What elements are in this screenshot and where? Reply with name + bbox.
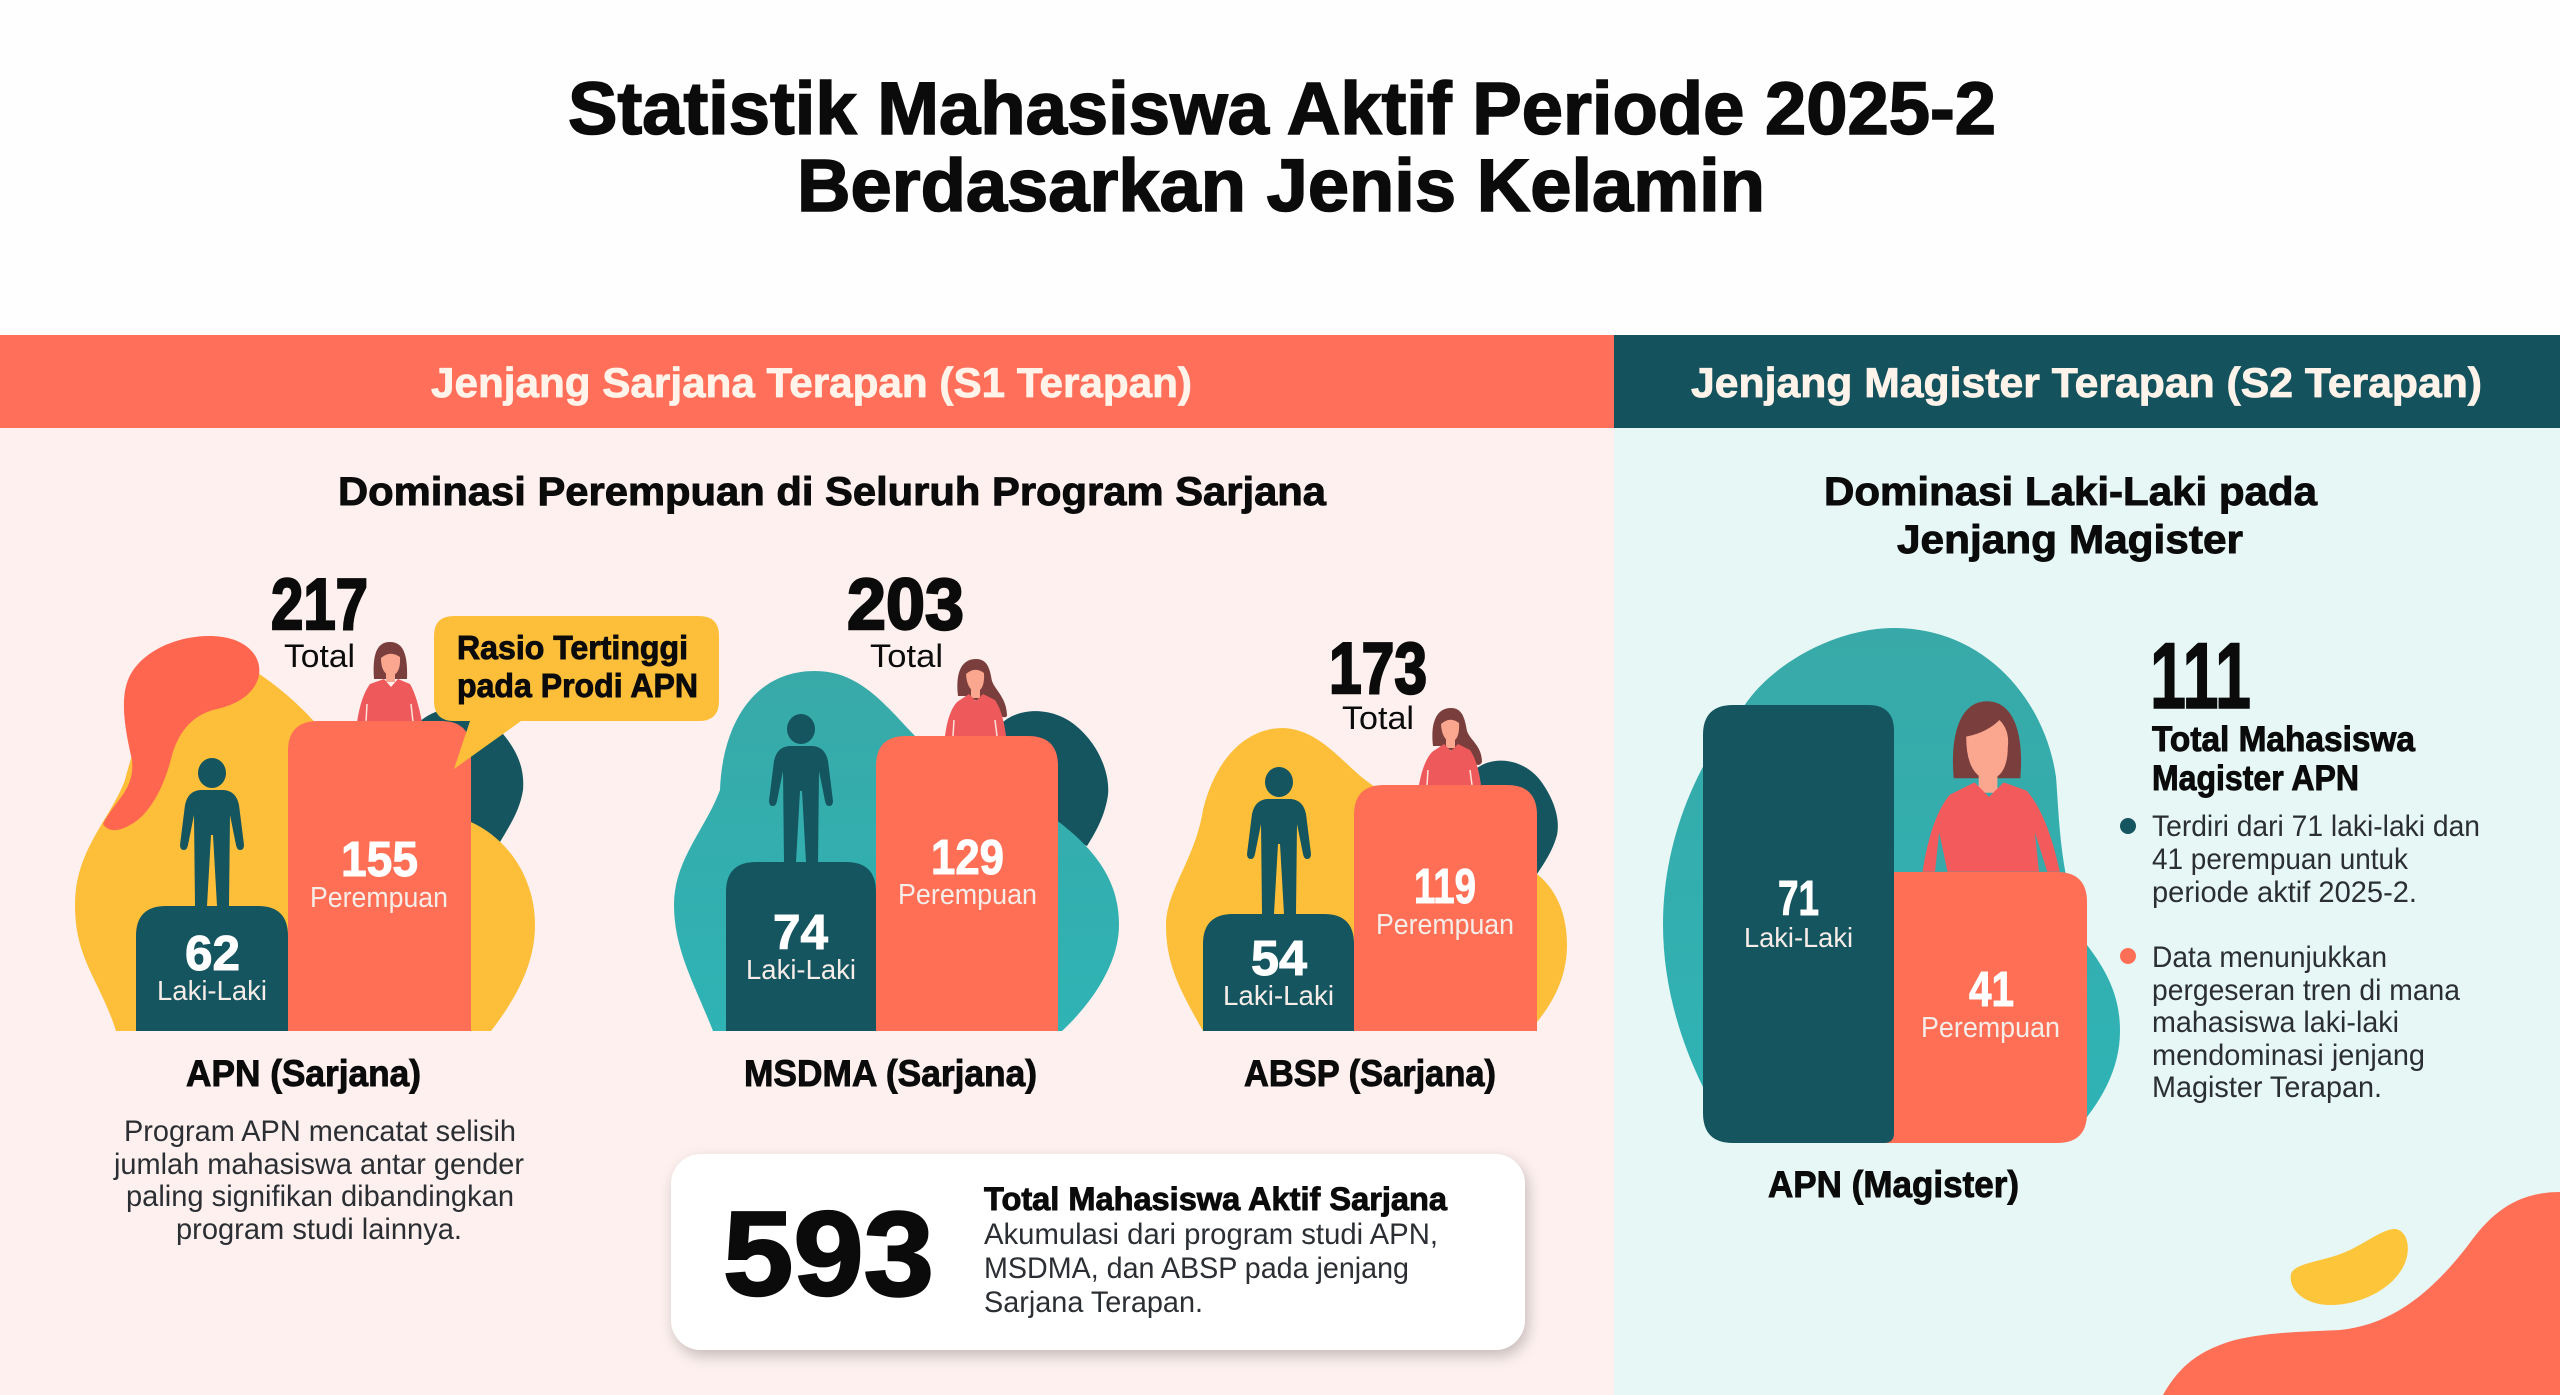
value: 41 perempuan: Perempuan — [1921, 1012, 2060, 1044]
blob: coral — [103, 636, 259, 830]
card text: Sarjana Terapan. — [984, 1286, 1203, 1319]
title — [568, 67, 1996, 227]
value: 71 laki-laki: Laki-Laki — [1744, 922, 1853, 953]
description: APN: jumlah mahasiswa antar gender — [113, 1148, 524, 1181]
bullet text 1: 41 perempuan untuk — [2152, 843, 2409, 876]
value: 74 laki-laki — [746, 906, 856, 985]
bar: laki-laki 62 — [136, 906, 288, 1031]
label: MSDMA Sarjana: MSDMA (Sarjana) — [744, 1053, 1037, 1094]
chart: ABSP Sarjana — [1166, 629, 1567, 1094]
subheading: Magister: Jenjang Magister — [1897, 518, 2243, 562]
icon: woman — [357, 642, 422, 722]
value: 41 perempuan: 41 — [1969, 963, 2014, 1017]
total: 217: 217 — [271, 565, 368, 645]
value: 54 laki-laki: Laki-Laki — [1223, 980, 1334, 1011]
bullet text 2: mahasiswa laki-laki — [2152, 1006, 2399, 1039]
description: APN: program studi lainnya. — [176, 1213, 462, 1246]
stat: 111 total: Magister APN — [2152, 759, 2359, 798]
bullet text 1: periode aktif 2025-2. — [2152, 876, 2417, 909]
bar: perempuan 41 — [1860, 872, 2087, 1143]
total: 217: Total — [284, 638, 355, 674]
subheading: Sarjana: Dominasi Perempuan di Seluruh Program Sarjana — [338, 470, 1327, 514]
value: 129 perempuan: Perempuan — [898, 879, 1037, 911]
icon: woman — [1923, 701, 2060, 872]
value: 119 perempuan: 119 — [1414, 860, 1476, 914]
value: 74 laki-laki: Laki-Laki — [746, 954, 856, 985]
bar: perempuan 119 — [1354, 785, 1537, 1031]
value: 129 perempuan: 129 — [931, 831, 1004, 885]
chart: APN Sarjana — [75, 565, 719, 1246]
total: 173: Total — [1342, 700, 1414, 736]
value: 62 laki-laki: 62 — [185, 927, 240, 981]
chart: MSDMA Sarjana — [674, 565, 1119, 1094]
callout: rasio tertinggi: Rasio Tertinggi — [457, 629, 688, 666]
bar: perempuan 155 — [288, 721, 471, 1031]
bar: laki-laki 74 — [726, 862, 876, 1031]
total: 173 — [1329, 629, 1427, 736]
bullet text 2: Magister Terapan. — [2152, 1071, 2382, 1104]
title: Berdasarkan Jenis Kelamin — [797, 144, 1765, 227]
icon: man — [769, 714, 833, 862]
panel background: Magister — [1614, 428, 2560, 1395]
value: 129 perempuan — [898, 831, 1037, 911]
value: 62 laki-laki: Laki-Laki — [157, 975, 267, 1006]
description: APN: Program APN mencatat selisih — [124, 1115, 516, 1148]
blob: yellow — [1166, 728, 1567, 1031]
value: 54 laki-laki: 54 — [1251, 932, 1307, 986]
value: 119 perempuan: Perempuan — [1376, 909, 1514, 941]
stat: 111 total — [2150, 623, 2416, 798]
description: APN — [113, 1115, 524, 1246]
value: 74 laki-laki: 74 — [773, 906, 828, 960]
icon: man — [180, 758, 244, 906]
label: APN Sarjana: APN (Sarjana) — [186, 1053, 421, 1094]
label: APN Magister: APN (Magister) — [1768, 1164, 2019, 1205]
total: 203: 203 — [847, 565, 964, 645]
value: 155 perempuan: Perempuan — [310, 882, 448, 914]
blob: dark teal — [1000, 711, 1108, 846]
blob: dark teal — [1470, 761, 1558, 874]
callout: rasio tertinggi — [434, 616, 719, 769]
chart: APN Magister — [1663, 628, 2120, 1205]
label: ABSP Sarjana: ABSP (Sarjana) — [1244, 1053, 1496, 1094]
stat: 111 total: Total Mahasiswa — [2152, 720, 2416, 759]
card text: Akumulasi dari program studi APN, — [984, 1218, 1438, 1251]
bullet text 2: pergeseran tren di mana — [2152, 974, 2460, 1007]
card text — [984, 1181, 1447, 1319]
header bar: Sarjana: Jenjang Sarjana Terapan (S1 Terapan) — [431, 359, 1192, 406]
blob: teal — [674, 671, 1119, 1031]
title: Statistik Mahasiswa Aktif Periode 2025-2 — [568, 67, 1996, 150]
card: total sarjana 593 — [671, 1154, 1525, 1350]
panel background: Sarjana — [0, 428, 1614, 1395]
bullet text 2 — [2120, 941, 2460, 1104]
value: 155 perempuan: 155 — [341, 833, 418, 887]
blob: dark teal — [412, 708, 523, 842]
total: 217 — [271, 565, 368, 674]
subheading: Magister: Dominasi Laki-Laki pada — [1824, 470, 2318, 514]
value: 62 laki-laki — [157, 927, 267, 1006]
value: 54 laki-laki — [1223, 932, 1334, 1011]
bar: laki-laki 71 — [1703, 705, 1894, 1143]
icon: woman — [1419, 708, 1482, 785]
page background — [0, 0, 2560, 335]
header bar: Magister: Jenjang Magister Terapan (S2 Terapan) — [1691, 359, 2482, 406]
bullet text 2: Data menunjukkan — [2152, 941, 2387, 974]
bar: perempuan 129 — [876, 736, 1058, 1031]
icon: man — [1247, 767, 1311, 914]
panel: Magister — [1614, 335, 2560, 1395]
total: 203: Total — [870, 638, 943, 674]
total: 173: 173 — [1329, 629, 1427, 709]
value: 119 perempuan — [1376, 860, 1514, 941]
header bar: Magister — [1614, 335, 2560, 428]
bar: laki-laki 54 — [1203, 914, 1354, 1031]
header bar: Sarjana — [0, 335, 1614, 428]
bullet text 1: Terdiri dari 71 laki-laki dan — [2152, 810, 2480, 843]
panel: Sarjana — [0, 335, 1614, 1395]
value: 71 laki-laki — [1744, 872, 1853, 953]
callout: rasio tertinggi: pada Prodi APN — [457, 667, 698, 704]
decoration: coral blob — [2163, 1192, 2560, 1395]
card text: MSDMA, dan ABSP pada jenjang — [984, 1252, 1409, 1285]
subheading: Magister — [1824, 470, 2318, 562]
value: 71 laki-laki: 71 — [1778, 872, 1819, 926]
bullet text 1 — [2120, 810, 2480, 909]
blob: teal — [1663, 628, 2120, 1117]
value: 155 perempuan — [310, 833, 448, 914]
description: APN: paling signifikan dibandingkan — [126, 1180, 514, 1213]
bullet text 2: mendominasi jenjang — [2152, 1039, 2425, 1072]
number: 593: 593 — [723, 1187, 934, 1321]
value: 41 perempuan — [1921, 963, 2060, 1044]
icon: woman — [945, 659, 1007, 736]
card text: Total Mahasiswa Aktif Sarjana — [984, 1181, 1447, 1217]
decoration: yellow blob — [2291, 1229, 2408, 1305]
stat: 111 total: 111 — [2150, 623, 2251, 728]
blob: yellow — [75, 667, 535, 1031]
